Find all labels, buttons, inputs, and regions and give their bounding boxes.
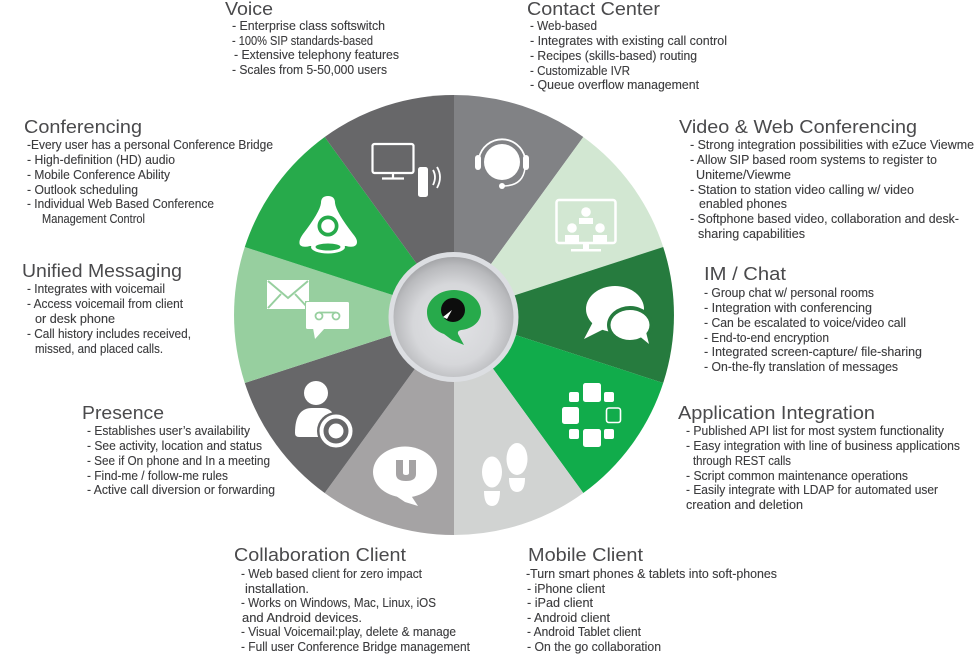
text block: IM and chat: - Can be escalated to voice/video call	[704, 316, 906, 330]
text block: IM and chat: - End-to-end encryption	[704, 331, 829, 345]
text block: IM and chat: - Integrated screen-capture/ file-sharing	[704, 345, 922, 359]
icon: video conference screen	[556, 200, 616, 252]
text block: voice: - Extensive telephony features	[234, 48, 399, 62]
text block: IM and chat	[704, 263, 922, 374]
text block: IM and chat: - On-the-fly translation of messages	[704, 360, 898, 374]
segment: video and web conferencing	[454, 137, 663, 315]
text block: application integration: - Easily integrate with LDAP for automated user	[686, 483, 938, 497]
text block: unified messaging: - Access voicemail from client	[27, 297, 183, 311]
text block: IM and chat: - Group chat w/ personal rooms	[704, 286, 874, 300]
text block: unified messaging: - Integrates with voicemail	[27, 282, 165, 296]
text block: mobile client: -Turn smart phones & tablets into soft-phones	[526, 567, 777, 581]
text block: video and web conferencing: Uniteme/Viewme	[696, 168, 791, 182]
segment: IM and chat	[454, 247, 674, 383]
segment: collaboration client	[325, 315, 454, 535]
text block: video and web conferencing: - Station to station video calling w/ video	[690, 183, 914, 197]
text block: contact center: - Customizable IVR	[530, 64, 630, 78]
icon: voice monitor and handset	[372, 144, 440, 197]
icon: envelope and voicemail bubble	[267, 280, 350, 339]
text block: video and web conferencing: - Strong integration possibilities with eZuce Viewme	[690, 138, 974, 152]
text block: presence: - See if On phone and In a meeting	[87, 454, 270, 468]
text block: contact center: - Web-based	[530, 19, 597, 33]
heading: IM and chat: IM / Chat	[704, 263, 786, 284]
text block: application integration: - Easy integration with line of business applications	[686, 439, 960, 453]
text block: contact center: - Recipes (skills-based) routing	[530, 49, 697, 63]
text block: unified messaging: missed, and placed calls.	[35, 342, 163, 356]
icon: conference phone	[299, 196, 357, 254]
text block: contact center: - Queue overflow management	[530, 78, 700, 92]
text block: video and web conferencing: - Allow SIP based room systems to register to	[690, 153, 937, 167]
text block: unified messaging: - Call history includes received,	[27, 327, 191, 341]
text block: conferencing: Management Control	[42, 212, 145, 226]
icon: footprints	[482, 443, 528, 506]
text block: application integration: through REST calls	[693, 454, 791, 468]
text block: collaboration client: and Android devices.	[242, 611, 362, 625]
text block: conferencing	[24, 116, 273, 226]
segment: application integration	[454, 315, 663, 493]
text block: collaboration client: - Web based client for zero impact	[241, 567, 423, 581]
text block: mobile client: - iPad client	[527, 596, 594, 610]
text block: voice: - Enterprise class softswitch	[232, 19, 385, 33]
text block: mobile client: - iPhone client	[527, 582, 606, 596]
text block: video and web conferencing: - Softphone based video, collaboration and desk-	[690, 212, 959, 226]
icon: headset	[475, 139, 529, 189]
text block: application integration	[678, 402, 960, 512]
icon: center hub with logo	[388, 252, 518, 382]
segment: conferencing	[245, 137, 454, 315]
heading: video and web conferencing: Video & Web Conferencing	[679, 116, 917, 137]
text block: collaboration client: installation.	[245, 582, 309, 596]
text block: mobile client	[526, 544, 777, 654]
segment: voice	[325, 95, 454, 315]
icon: presence user	[295, 381, 355, 450]
heading: application integration: Application Integration	[678, 402, 875, 423]
segment: unified messaging	[234, 247, 454, 383]
text block: conferencing: - Mobile Conference Ability	[27, 168, 171, 182]
text block: contact center	[527, 0, 727, 92]
text block: application integration: creation and deletion	[686, 498, 803, 512]
heading: conferencing: Conferencing	[24, 116, 142, 137]
panel: wheel segments	[234, 95, 674, 535]
text block: IM and chat: - Integration with conferencing	[704, 301, 872, 315]
text block: video and web conferencing	[679, 116, 974, 241]
text block: mobile client: - Android Tablet client	[527, 625, 641, 639]
text block: conferencing: -Every user has a personal Conference Bridge	[27, 138, 273, 152]
heading: presence: Presence	[82, 402, 164, 423]
segment: presence	[245, 315, 454, 493]
text block: conferencing: - Individual Web Based Conference	[27, 197, 214, 211]
text block: collaboration client: - Works on Windows, Mac, Linux, iOS	[241, 596, 436, 610]
icon: collaboration bubble with U	[373, 446, 437, 506]
heading: mobile client: Mobile Client	[528, 544, 643, 565]
text block: video and web conferencing: enabled phones	[699, 197, 787, 211]
text block: presence: - Find-me / follow-me rules	[87, 469, 228, 483]
text block: conferencing: - Outlook scheduling	[27, 183, 138, 197]
text block: mobile client: - On the go collaboration	[527, 640, 661, 654]
segment: contact center	[454, 95, 583, 315]
icon: chat bubbles	[584, 286, 653, 344]
text block: unified messaging: or desk phone	[35, 312, 115, 326]
text block: contact center: - Integrates with existing call control	[530, 34, 727, 48]
text block: voice: - Scales from 5-50,000 users	[232, 63, 387, 77]
text block: voice: - 100% SIP standards-based	[232, 34, 373, 48]
text block: mobile client: - Android client	[527, 611, 611, 625]
heading: unified messaging: Unified Messaging	[22, 260, 182, 281]
text block: video and web conferencing: sharing capabilities	[698, 227, 805, 241]
text block: unified messaging	[22, 260, 191, 356]
icon: application grid	[562, 383, 620, 447]
text block: application integration: - Published API list for most system functionality	[686, 424, 945, 438]
segment: mobile client	[454, 315, 583, 535]
text block: presence: - Active call diversion or forwarding	[87, 483, 275, 497]
text block: collaboration client	[234, 544, 470, 654]
text block: collaboration client: - Full user Conference Bridge management	[241, 640, 470, 654]
text block: presence	[82, 402, 275, 497]
text block: voice	[225, 0, 399, 77]
text block: presence: - Establishes user’s availability	[87, 424, 251, 438]
text block: application integration: - Script common maintenance operations	[686, 469, 908, 483]
text block: presence: - See activity, location and status	[87, 439, 262, 453]
heading: collaboration client: Collaboration Client	[234, 544, 406, 565]
text block: conferencing: - High-definition (HD) audio	[27, 153, 175, 167]
text block: collaboration client: - Visual Voicemail:play, delete & manage	[241, 625, 456, 639]
